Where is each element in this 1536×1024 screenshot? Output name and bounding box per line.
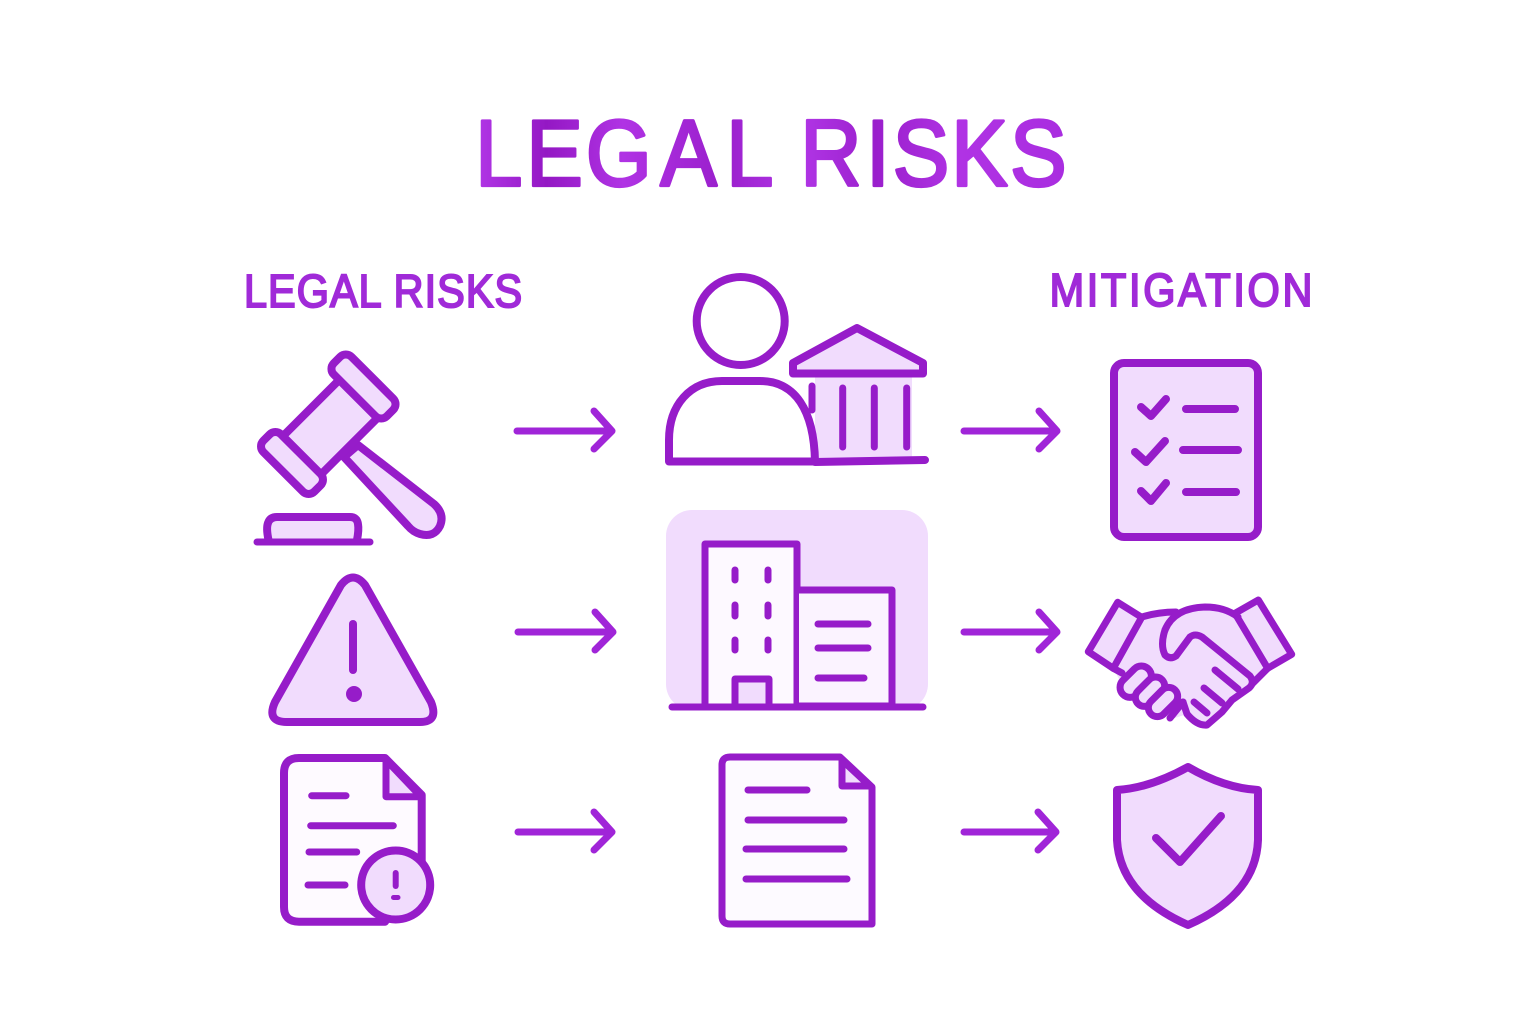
arrow: row 3 left xyxy=(518,812,612,850)
heading: legal risks column: LEGAL RISKS xyxy=(244,266,522,318)
icon: warning triangle xyxy=(272,578,433,722)
heading: mitigation column: MITIGATION xyxy=(1050,265,1312,317)
icon: plain document xyxy=(722,757,872,924)
title: LEGAL RISKS xyxy=(475,100,1067,205)
arrow: row 2 right xyxy=(964,612,1057,650)
icon: handshake xyxy=(1088,600,1292,725)
icon: shield with check xyxy=(1117,767,1258,925)
arrow: row 3 right xyxy=(964,812,1056,850)
icon: person and courthouse xyxy=(669,277,925,462)
arrow: row 2 left xyxy=(518,612,613,650)
arrow: row 1 right xyxy=(964,411,1057,449)
icon: gavel xyxy=(257,351,442,542)
arrow: row 1 left xyxy=(517,411,612,449)
icon: checklist xyxy=(1114,363,1258,537)
icon: document with alert xyxy=(284,758,430,922)
icon: office buildings xyxy=(666,510,928,710)
